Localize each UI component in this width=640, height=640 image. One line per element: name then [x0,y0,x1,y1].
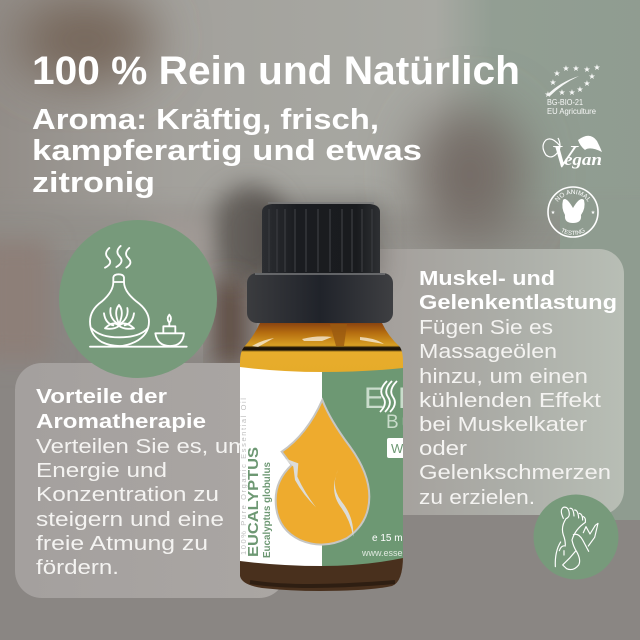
label text: E [364,382,384,415]
icon: EU organic certification: ★ [562,64,570,73]
text block: Aromatherapie benefit: Verteilen Sie es, um [36,436,248,458]
text block: Aromatherapie benefit: Konzentration zu [36,484,219,506]
label text: EUCALYPTUS [246,447,262,557]
text block: Muskel benefit: bei Muskelkater [419,414,587,436]
text block: Aromatherapie benefit: fördern. [36,557,119,579]
label text: e 15 ml [372,533,405,544]
bottle label [240,367,403,566]
text block: Muskel benefit: Massageölen [419,341,557,363]
text block: Muskel benefit: zu erzielen. [419,487,535,509]
icon: EU organic certification: ★ [553,69,561,78]
text block: Muskel benefit: oder [419,438,467,460]
text block: Muskel benefit: hinzu, um einen [419,366,588,388]
icon: EU organic certification: BG-BIO-21 [547,98,583,107]
text block: Aromatherapie benefit: Energie und [36,460,167,482]
icon: EU organic certification: EU Agriculture [547,107,597,116]
bottle shadow [252,200,382,280]
icon: EU organic certification: ★ [568,88,576,97]
icon: no animal testing: NO ANIMAL [554,190,590,202]
label text: Bu [386,412,415,433]
icon: EU organic certification: ★ [576,85,584,94]
icon: no animal testing: TESTING [562,228,585,235]
icon: vegan label: V [551,138,579,174]
heading: aroma description: kampferartig und etwas [32,135,422,167]
label text: 100% Pure Organic Essential Oil [239,398,248,555]
label text: www.essentialbu [361,548,429,558]
panel: right benefit card [300,249,624,515]
label text: Eucalyptus globulus [261,462,273,558]
icon: no animal testing: ★ [551,210,556,216]
text block: Muskel benefit: Gelenkentlastung [419,292,617,314]
icon: EU organic certification [544,63,601,116]
text block: Aromatherapie benefit [36,386,248,579]
text block: Muskel benefit: kühlenden Effekt [419,390,602,412]
icon: EU organic certification: ★ [583,65,591,74]
icon: EU organic certification: ★ [593,63,601,72]
label drop [276,400,369,545]
product bottle [240,190,403,591]
label text [240,380,403,558]
label text: We [391,441,410,456]
text block: Aromatherapie benefit: Vorteile der [36,386,167,408]
bottle cap [247,203,393,323]
text block: Aromatherapie benefit: freie Atmung zu [36,533,208,555]
icon: EU organic certification: ★ [549,78,557,87]
icon: aromatherapy circle [59,220,217,378]
title: 100 % Rein und Natürlich [32,49,520,93]
text block: Muskel benefit [419,268,617,509]
text block: Aromatherapie benefit: Aromatherapie [36,411,206,433]
text block: Muskel benefit: Muskel- und [419,268,555,290]
icon: EU organic certification: ★ [583,79,591,88]
heading: aroma description [32,104,422,199]
icon: EU organic certification: ★ [572,64,580,73]
icon: vegan label [543,136,602,174]
icon: EU organic certification: ★ [544,90,552,99]
icon: vegan label: egan [564,150,602,169]
icon: EU organic certification: ★ [558,88,566,97]
heading: aroma description: Aroma: Kräftig, frisch, [32,104,379,136]
icon: foot massage circle [534,494,618,580]
bottle glass [240,323,403,591]
icon: no animal testing [547,186,599,238]
icon: diffuser and candle [90,246,187,347]
icon: no animal testing: ★ [591,210,596,216]
text block: Aromatherapie benefit: steigern und eine [36,509,224,531]
icon: EU organic certification: ★ [588,72,596,81]
text block: Muskel benefit: Fügen Sie es [419,317,553,339]
heading: aroma description: zitronig [32,167,155,199]
panel: left benefit card [15,363,286,598]
label text: E [398,382,418,415]
text block: Muskel benefit: Gelenkschmerzen [419,462,611,484]
